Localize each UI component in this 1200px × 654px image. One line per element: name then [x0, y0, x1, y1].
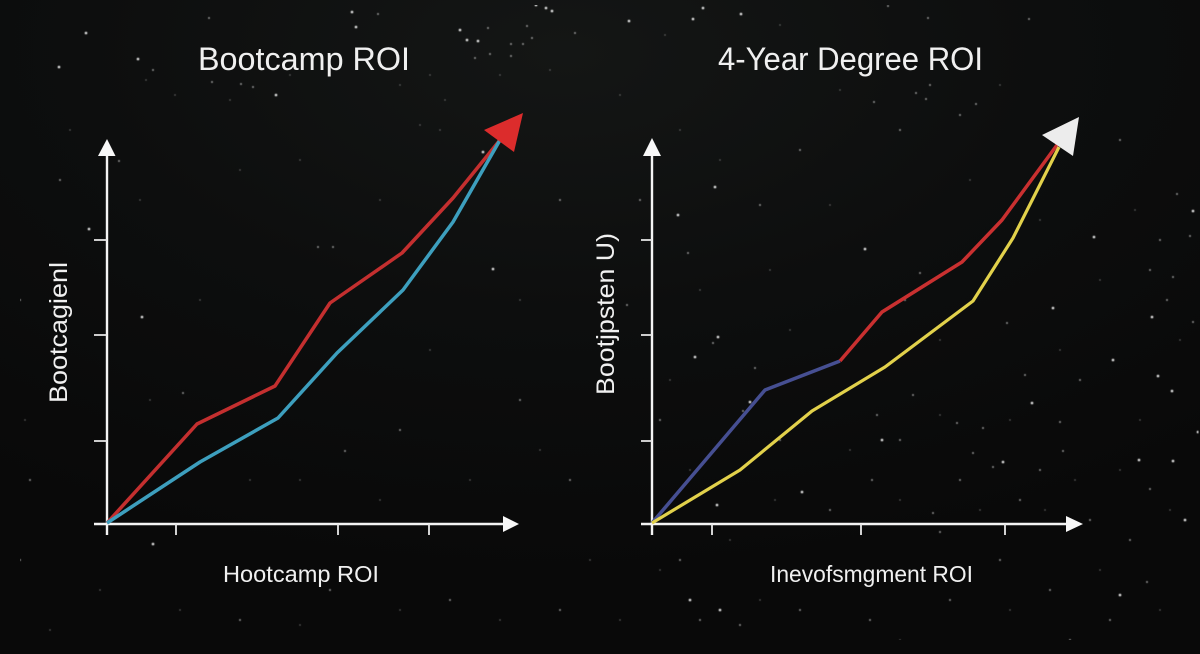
y axis with arrow: [643, 138, 661, 535]
y axis ticks: [94, 240, 107, 441]
y axis label: Bootjpsten U): [592, 233, 620, 395]
red line: [107, 140, 500, 523]
y axis ticks: [641, 240, 652, 441]
navy line segment: [652, 361, 840, 523]
red line segment: [840, 145, 1057, 361]
x axis ticks: [712, 524, 1005, 535]
panel: bootcamp chart: [45, 113, 523, 587]
x axis label: Inevofsmgment ROI: [770, 561, 973, 587]
x axis with arrow: [94, 516, 519, 532]
x axis ticks: [176, 524, 429, 535]
title: Bootcamp ROI: Bootcamp ROI: [198, 41, 410, 77]
icon: white arrowhead: [1042, 117, 1079, 156]
yellow line: [652, 147, 1059, 523]
x axis label: Hootcamp ROI: [223, 561, 379, 587]
blue line: [107, 140, 500, 523]
x axis with arrow: [641, 516, 1083, 532]
title: 4-Year Degree ROI: 4-Year Degree ROI: [718, 41, 983, 77]
y axis label: Bootcagienl: [45, 262, 73, 403]
icon: red arrowhead: [484, 113, 523, 152]
y axis with arrow: [98, 139, 116, 535]
panel: 4-year degree chart: [592, 117, 1083, 587]
